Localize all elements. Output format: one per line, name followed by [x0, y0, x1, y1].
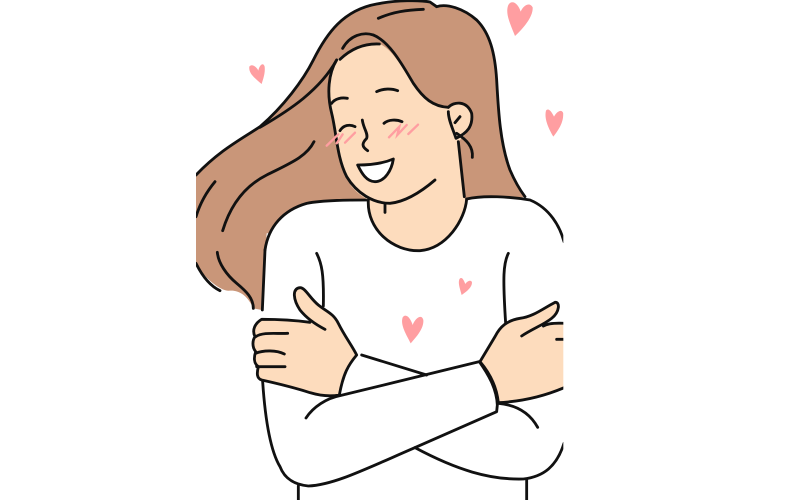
- heart: top right: [507, 2, 533, 36]
- right hand: [480, 302, 565, 403]
- illustration: woman hugging herself: [196, 0, 564, 500]
- blush: [327, 125, 418, 146]
- heart: large on shirt: [402, 316, 423, 343]
- mouth: [358, 159, 393, 182]
- nose: [362, 120, 368, 151]
- face and neck: [327, 34, 472, 251]
- hair: [196, 1, 525, 310]
- left hand: [253, 288, 357, 396]
- heart: left of head: [249, 64, 265, 84]
- ear: [448, 103, 472, 157]
- closed eyes: [340, 120, 402, 131]
- shirt: [262, 197, 565, 500]
- heart: small on shirt: [459, 278, 472, 295]
- heart: right of head: [545, 109, 563, 137]
- eyebrows: [332, 89, 398, 103]
- crossed arms: [263, 355, 565, 486]
